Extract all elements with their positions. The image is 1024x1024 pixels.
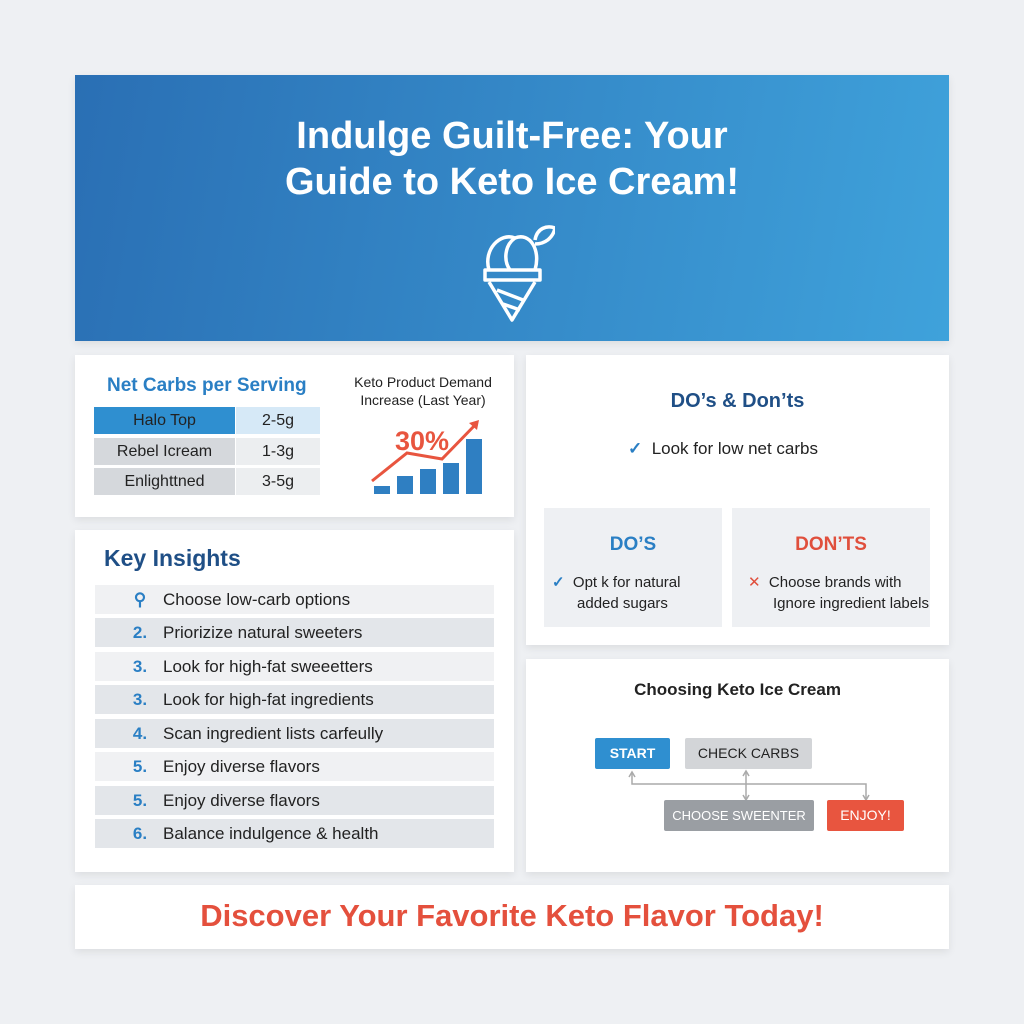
panel: flowchart: [526, 659, 949, 872]
footer call to action: [75, 885, 949, 949]
carbs table: Halo Top: [133, 412, 196, 429]
heading dos & donts: DO’s & Don’ts: [671, 390, 804, 412]
insights list: [95, 585, 494, 848]
step: choose sweetener: [664, 800, 814, 831]
title: Indulge Guilt-Free: Your: [296, 115, 728, 157]
carbs table: 1-3g: [262, 443, 294, 460]
bar chart with trend arrow: [371, 420, 482, 494]
step: choose sweetener: CHOOSE SWEENTER: [672, 808, 806, 823]
box: dos: DO’S: [610, 534, 656, 555]
insights list: 3.: [133, 657, 147, 676]
icon: ice cream cone: [483, 225, 555, 322]
insights list: Enjoy diverse flavors: [163, 757, 320, 776]
header banner: [75, 75, 949, 341]
panel: key insights: [75, 530, 514, 872]
carbs table: Enlighttned: [124, 473, 205, 490]
box: dos: added sugars: [577, 595, 668, 612]
title: Guide to Keto Ice Cream!: [285, 161, 739, 203]
insights list: Look for high-fat sweeetters: [163, 657, 373, 676]
insights list: Look for high-fat ingredients: [163, 690, 374, 709]
box: donts: ✕ Choose brands with: [748, 574, 902, 591]
insights list: 5.: [133, 757, 147, 776]
step: check carbs: CHECK CARBS: [698, 745, 799, 761]
insights list: 3.: [133, 690, 147, 709]
chart caption: [354, 374, 492, 408]
insights list: ⚲: [134, 590, 146, 609]
insights list: 4.: [133, 724, 147, 743]
step: enjoy: ENJOY!: [840, 807, 891, 823]
carbs table: 3-5g: [262, 473, 294, 490]
heading flowchart: Choosing Keto Ice Cream: [634, 680, 841, 699]
chart caption: Keto Product Demand: [354, 374, 492, 390]
box: donts: Ignore ingredient labels: [773, 595, 929, 612]
step: start: START: [610, 745, 655, 761]
chart caption: Increase (Last Year): [360, 392, 486, 408]
step: enjoy: [827, 800, 904, 831]
tip: low net carbs: ✓ Look for low net carbs: [628, 439, 818, 458]
insights list: Enjoy diverse flavors: [163, 791, 320, 810]
step: check carbs: [685, 738, 812, 769]
insights list: Choose low-carb options: [163, 590, 350, 609]
insights list: 2.: [133, 623, 147, 642]
box: dos: [544, 508, 722, 627]
insights list: 6.: [133, 824, 147, 843]
box: donts: DON’TS: [795, 534, 867, 555]
heading key insights: Key Insights: [104, 545, 241, 571]
box: donts: [732, 508, 930, 627]
insights list: Scan ingredient lists carfeully: [163, 724, 383, 743]
carbs table: Rebel Icream: [117, 443, 212, 460]
footer call to action: Discover Your Favorite Keto Flavor Today!: [200, 898, 824, 933]
flow connectors: [628, 770, 870, 800]
panel: dos and donts: [526, 355, 949, 645]
heading net carbs: Net Carbs per Serving: [107, 375, 307, 396]
insights list: Balance indulgence & health: [163, 824, 378, 843]
insights list: Priorizize natural sweeters: [163, 623, 362, 642]
carbs table: 2-5g: [262, 412, 294, 429]
insights list: 5.: [133, 791, 147, 810]
title: [285, 115, 739, 203]
box: dos: ✓ Opt k for natural: [552, 574, 680, 591]
step: start: [595, 738, 670, 769]
bar chart with trend arrow: 30%: [395, 426, 449, 456]
panel: net carbs: [75, 355, 514, 517]
carbs table: [94, 407, 320, 495]
